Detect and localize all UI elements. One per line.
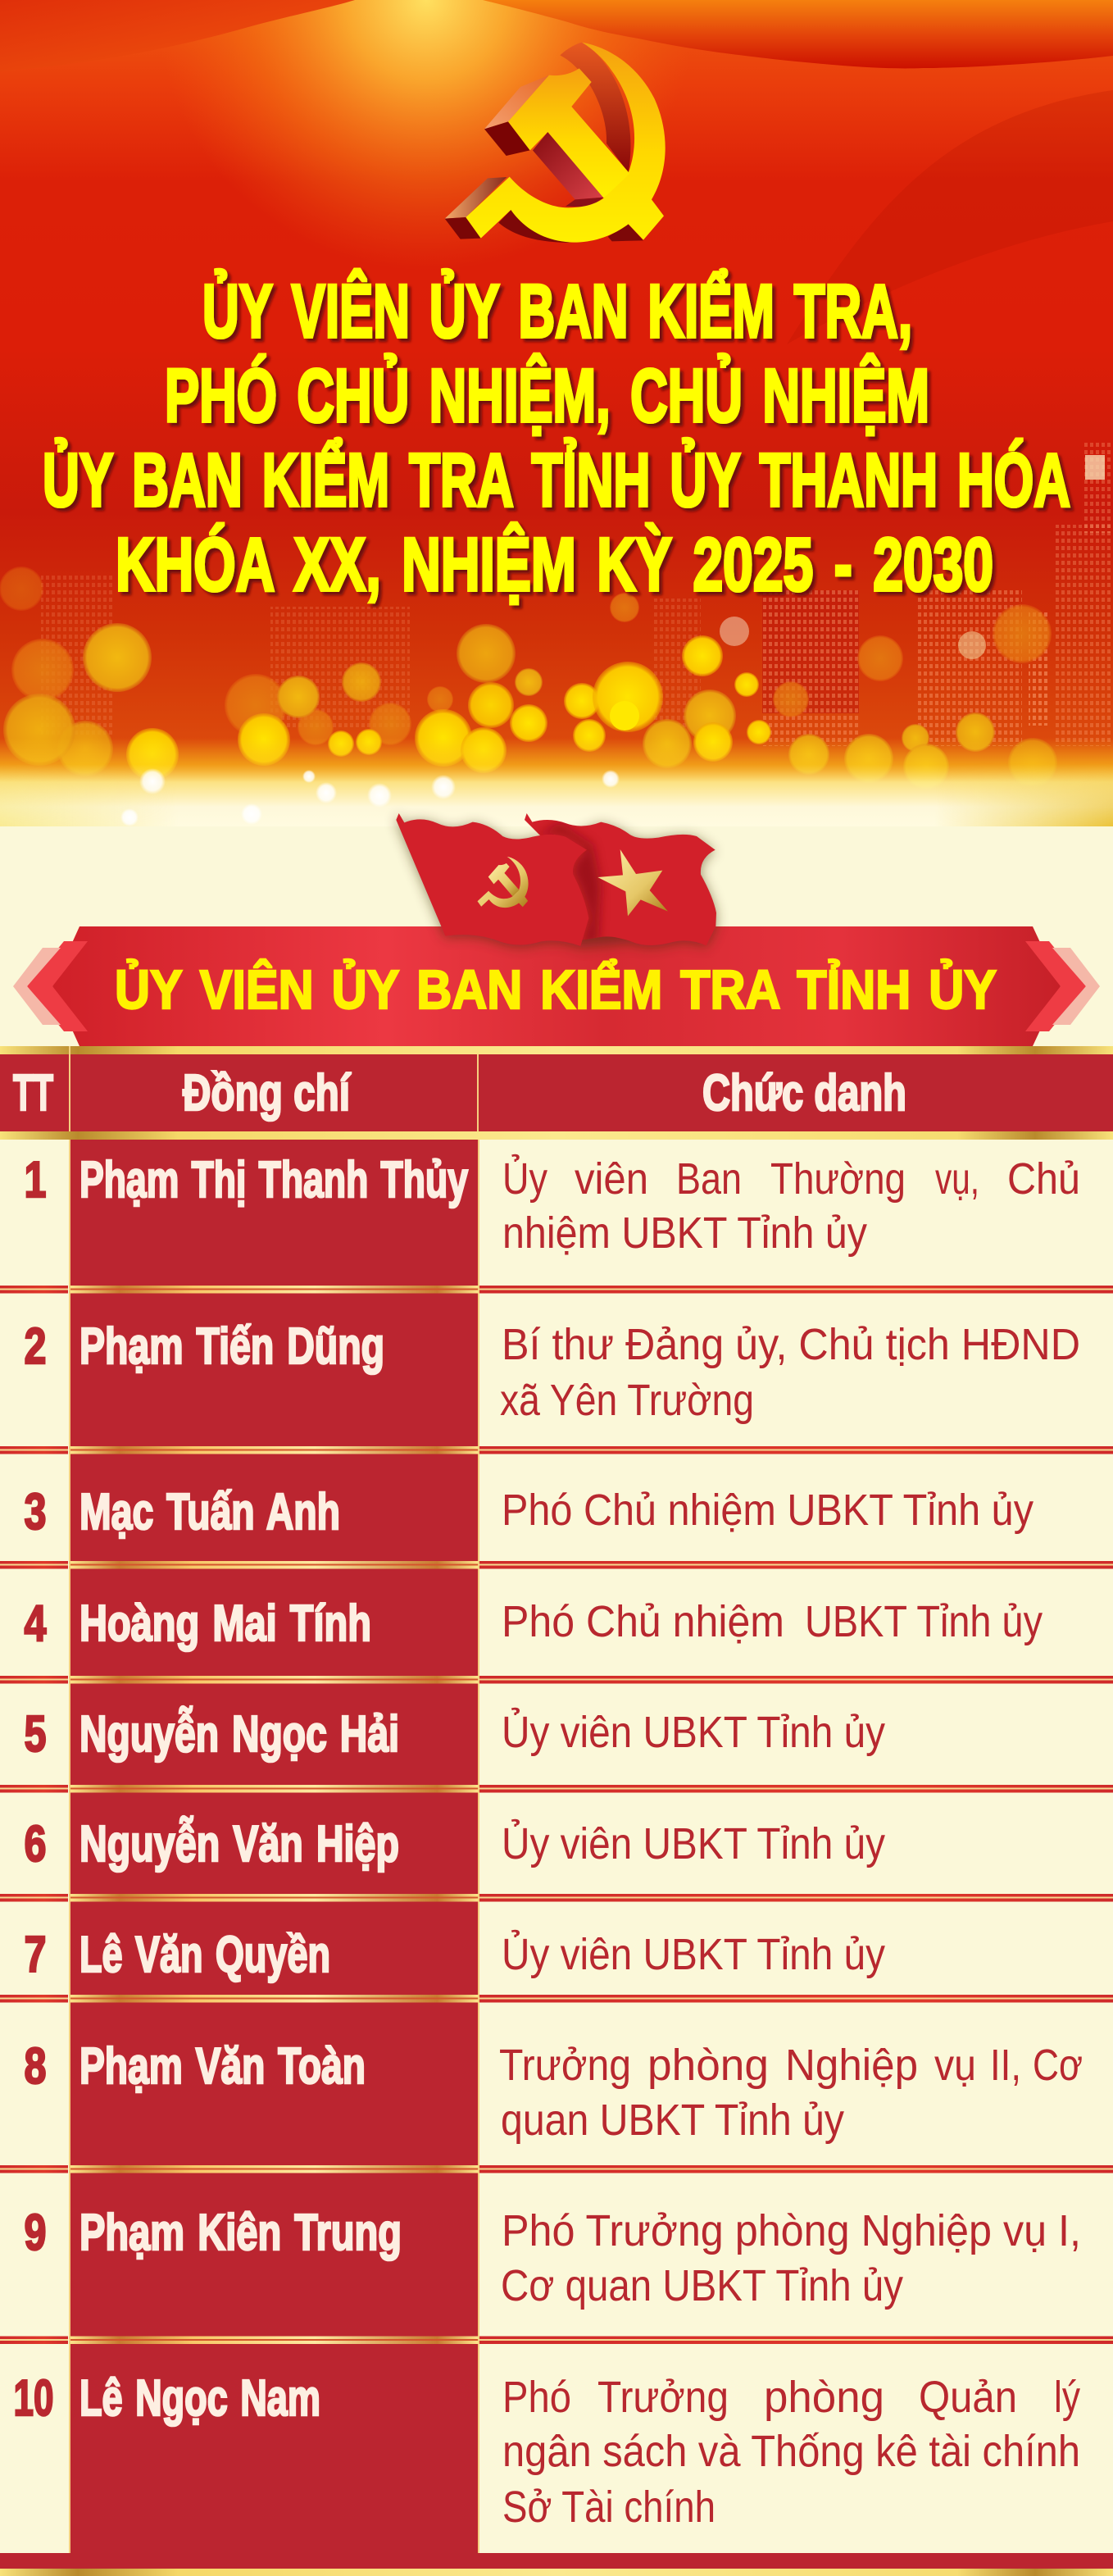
row 7: Ủy viên UBKT Tỉnh ủy (502, 1930, 885, 1979)
row 2: Phạm Tiến Dũng (80, 1318, 384, 1375)
ribbon heading: ỦY VIÊN ỦY BAN KIỂM TRA TỈNH ỦY (115, 959, 997, 1021)
row 5 (25, 1706, 885, 1763)
row 4: Hoàng Mai Tính (80, 1595, 371, 1652)
panel: table (0, 1046, 1113, 2576)
row 2: xã Yên Trường (500, 1376, 754, 1425)
row 9: 9 (25, 2205, 46, 2261)
row 8: Phạm Văn Toàn (80, 2038, 366, 2095)
flag: party flag (396, 813, 588, 946)
row 1: Thường (770, 1154, 906, 1204)
arrow: right chevrons (1025, 941, 1100, 1031)
row 6 (25, 1816, 885, 1873)
row 6: Ủy viên UBKT Tỉnh ủy (502, 1819, 885, 1868)
table header row: Đồng chí (183, 1065, 351, 1122)
skyline: right buildings (762, 443, 1113, 746)
row 3: 3 (25, 1484, 46, 1541)
row 8: 8 (25, 2038, 46, 2095)
row 1 (25, 1152, 1080, 1258)
table header row: Chức danh (702, 1065, 906, 1122)
row 10: Quản (919, 2373, 1017, 2422)
row 10: phòng (764, 2373, 884, 2422)
title (43, 268, 1070, 607)
row 8: quan UBKT Tỉnh ủy (501, 2096, 844, 2145)
row 8: vụ (934, 2041, 976, 2090)
table column backgrounds (0, 1054, 1113, 2553)
row 1: Ban (676, 1154, 742, 1204)
row 10: Sở Tài chính (502, 2483, 716, 2532)
row 8 (25, 2038, 1083, 2145)
row 8: phòng (647, 2041, 769, 2090)
row 5: 5 (25, 1706, 46, 1763)
table header row: TT (13, 1065, 53, 1122)
table footer band (0, 2553, 1113, 2576)
row 10: Trưởng (597, 2373, 729, 2422)
row 10: Lê Ngọc Nam (80, 2370, 320, 2427)
row 3: Mạc Tuấn Anh (80, 1484, 340, 1541)
icon: party and national flags (396, 813, 716, 948)
row 3: Phó Chủ nhiệm UBKT Tỉnh ủy (502, 1486, 1034, 1535)
row 9 (25, 2205, 1081, 2310)
skyline: left buildings (41, 574, 701, 738)
row 1: nhiệm UBKT Tỉnh ủy (502, 1208, 867, 1258)
row 1: viên (575, 1154, 648, 1204)
panel: hero background (0, 0, 1113, 826)
row 4: Phó Chủ nhiệm (502, 1597, 784, 1646)
row 10: 10 (13, 2370, 54, 2427)
row 4 (25, 1595, 1043, 1652)
row 1: Phạm Thị Thanh Thủy (80, 1152, 468, 1208)
row 6: Nguyễn Văn Hiệp (80, 1816, 399, 1873)
row 2: Bí thư Đảng ủy, Chủ tịch HĐND (502, 1320, 1080, 1369)
white light spots (120, 768, 620, 826)
row 9: Phạm Kiên Trung (80, 2205, 402, 2261)
bokeh lights (0, 567, 1057, 790)
row 1: Chủ (1007, 1154, 1080, 1204)
row 6: 6 (25, 1816, 46, 1873)
row 8: Trưởng (499, 2041, 631, 2090)
row 7 (25, 1927, 885, 1983)
row 10: Phó (502, 2373, 571, 2422)
row 3 (25, 1484, 1034, 1541)
row 1: 1 (25, 1152, 46, 1208)
row 4: 4 (25, 1595, 47, 1652)
row 2 (25, 1318, 1080, 1425)
row 5: Ủy viên UBKT Tỉnh ủy (502, 1708, 885, 1757)
row 5: Nguyễn Ngọc Hải (80, 1706, 399, 1763)
row 7: 7 (25, 1927, 46, 1983)
table header row (0, 1046, 1113, 1140)
row 9: Phó Trưởng phòng Nghiệp vụ I, (502, 2206, 1081, 2255)
panel: section ribbon (13, 926, 1100, 1046)
row 4: UBKT Tỉnh ủy (805, 1597, 1043, 1646)
row 1: vụ, (935, 1154, 979, 1204)
icon: hammer and sickle emblem (445, 43, 666, 243)
row 8: Cơ (1033, 2041, 1083, 2090)
row 7: Lê Văn Quyền (80, 1927, 330, 1983)
flag: national flag (525, 813, 716, 946)
row 10: lý (1054, 2373, 1080, 2422)
row 8: Nghiệp (785, 2041, 918, 2090)
row 2: 2 (25, 1318, 46, 1375)
arrow: left chevrons (13, 941, 88, 1031)
row 8: II, (990, 2041, 1021, 2090)
row 10 (13, 2370, 1080, 2532)
row 1: Ủy (502, 1154, 547, 1204)
row 9: Cơ quan UBKT Tỉnh ủy (501, 2261, 903, 2310)
